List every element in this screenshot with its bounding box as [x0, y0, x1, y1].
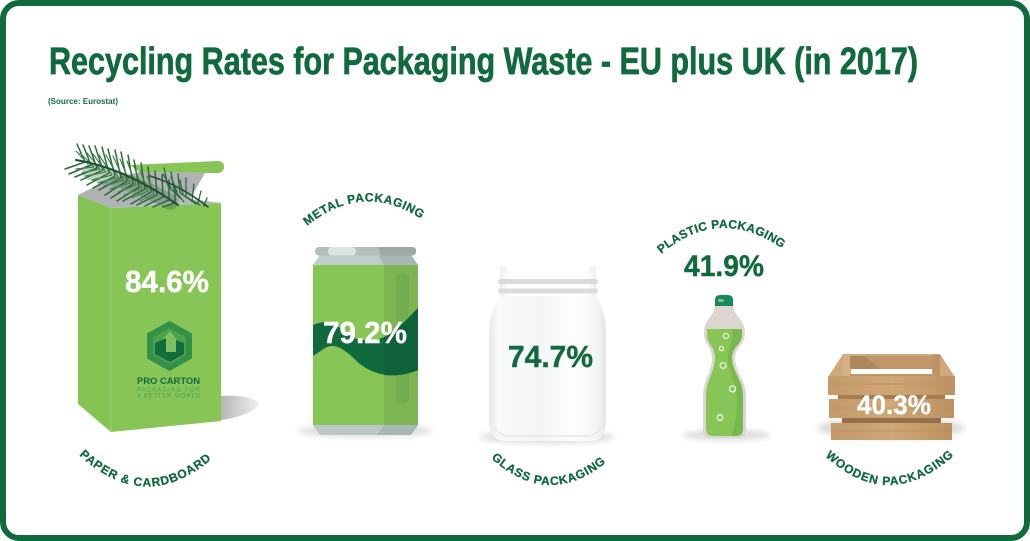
logo wordmark: PRO CARTON: [137, 375, 200, 386]
logo tagline: PACKAGING FOR: [137, 388, 201, 394]
box front face: [111, 203, 221, 432]
percentage 74.7: 74.7%: [508, 340, 593, 374]
can rim: [315, 247, 416, 256]
paper and cardboard box: [65, 144, 260, 432]
label: glass packaging: GLASS PACKAGING: [492, 454, 605, 486]
source note: (Source: Eurostat): [48, 97, 118, 106]
label: wooden packaging: WOODEN PACKAGING: [826, 450, 952, 486]
label: paper and cardboard: PAPER & CARDBOARD: [80, 449, 210, 487]
percentage 40.3: 40.3%: [857, 390, 931, 420]
can shadow: [297, 425, 433, 437]
box interior: [78, 172, 221, 208]
can bottom: [313, 425, 418, 435]
bottle shell: [703, 306, 746, 438]
percentage 41.9: 41.9%: [684, 250, 764, 283]
box left face: [78, 195, 111, 432]
box floor shadow: [221, 396, 260, 420]
percentage 84.6: 84.6%: [125, 265, 209, 299]
logo tagline second line: A BETTER WORLD: [137, 394, 201, 400]
metal can: [297, 247, 433, 437]
crate back panel: [850, 356, 933, 369]
bubbles: [717, 333, 736, 420]
glass jar: [479, 266, 615, 444]
jar shadow: [479, 430, 615, 444]
Pro Carton logo: [137, 321, 201, 394]
crate side boards: [828, 354, 955, 377]
can neck: [313, 255, 418, 265]
pine sprig: [65, 144, 208, 207]
jar body: [489, 266, 606, 441]
wooden crate: [817, 354, 965, 440]
crate gaps: [838, 394, 945, 400]
plastic bottle: [683, 295, 771, 440]
can wave: [313, 308, 418, 375]
label: plastic packaging: PLASTIC PACKAGING: [656, 220, 785, 254]
bottle cap: [715, 295, 733, 306]
can body: [313, 265, 418, 425]
bottle shadow: [683, 430, 771, 440]
box lid: [130, 161, 224, 173]
crate shadow: [817, 417, 965, 439]
jar neck rings: [498, 279, 598, 284]
crate planks: [828, 376, 955, 395]
bottle liquid: [706, 329, 743, 436]
percentage 79.2: 79.2%: [323, 316, 407, 350]
crate posts: [843, 355, 850, 377]
label: metal packaging: METAL PACKAGING: [302, 192, 424, 226]
